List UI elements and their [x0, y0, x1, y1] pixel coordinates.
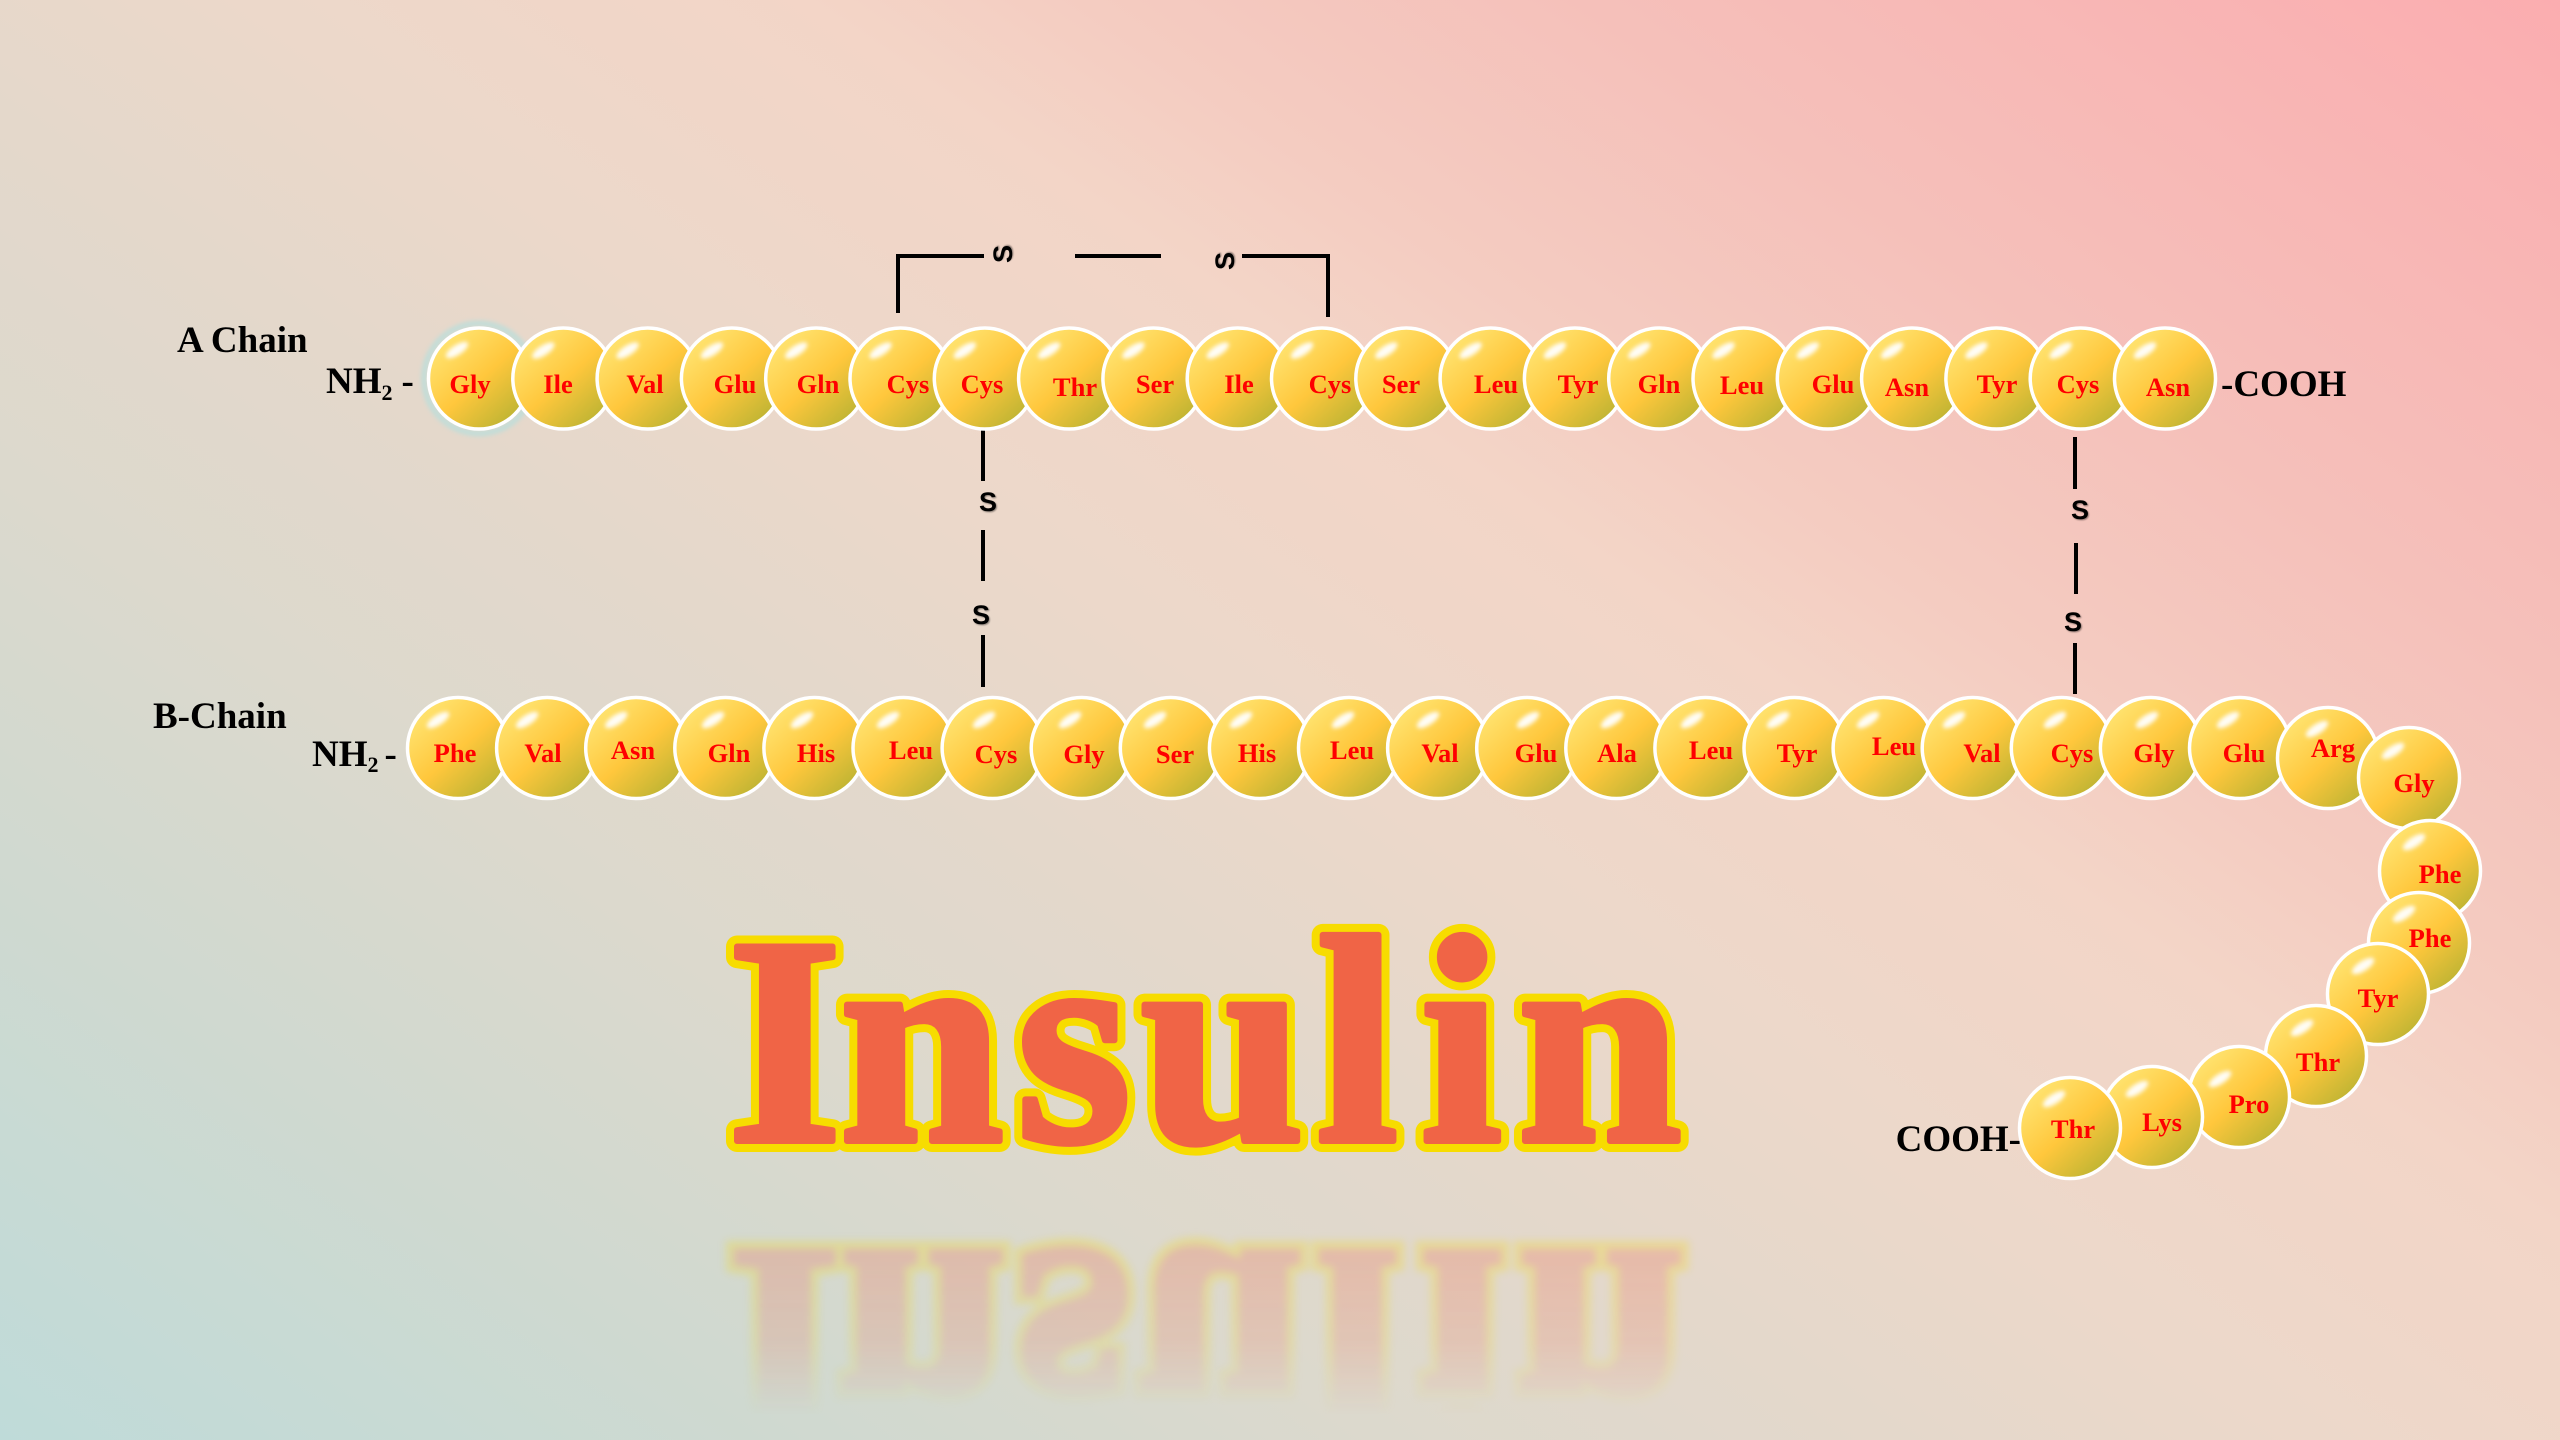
bead: Leu — [1440, 328, 1541, 429]
bead: Ala — [1566, 698, 1667, 798]
bead: Cys: Cys — [2057, 369, 2099, 399]
bead: Gly: Gly — [2133, 738, 2175, 768]
label: B-Chain: B-Chain — [153, 696, 287, 737]
bead: Cys — [942, 698, 1043, 798]
bead: Thr — [2020, 1078, 2120, 1178]
bead: Cys — [2011, 698, 2112, 798]
bead: Cys: Cys — [975, 739, 1017, 769]
bead: Phe — [2368, 892, 2470, 994]
bead: Leu: Leu — [1872, 731, 1916, 761]
bead: Cys: Cys — [961, 369, 1003, 399]
bead: Thr: Thr — [1053, 372, 1097, 402]
bead: Ala: Ala — [1597, 738, 1637, 768]
bead: Leu: Leu — [1474, 369, 1518, 399]
disulfide bridge: A Cys to B Cys left — [972, 430, 997, 687]
bead: Ser — [1120, 698, 1221, 798]
disulfide bridge: A Cys to B Cys right: S — [2071, 495, 2089, 525]
bead: Gln: Gln — [797, 369, 840, 399]
bead: Ser: Ser — [1382, 369, 1420, 399]
bead: Ser — [1356, 328, 1457, 429]
disulfide bridge: A Cys to B Cys right — [2064, 437, 2089, 694]
bead: Arg — [2278, 708, 2378, 808]
bead: Asn: Asn — [2146, 372, 2190, 402]
bead: Phe: Phe — [2419, 859, 2462, 889]
bead: Glu — [1477, 698, 1578, 798]
bead: Gln: Gln — [708, 738, 751, 768]
bead: Ser: Ser — [1156, 739, 1194, 769]
bead: Gly: Gly — [1063, 739, 1105, 769]
bead: Tyr — [1524, 328, 1625, 429]
bead: Lys — [2102, 1066, 2202, 1168]
bead: Ser — [1103, 328, 1204, 429]
bead: Phe: Phe — [2409, 923, 2452, 953]
disulfide bridge: A Cys to B Cys left: S — [979, 487, 997, 517]
bead: Gly — [2358, 728, 2460, 828]
bead: Tyr: Tyr — [1777, 738, 1818, 768]
bead: Cys: Cys — [1309, 369, 1351, 399]
bead: Gln: Gln — [1638, 369, 1681, 399]
bead: Leu: Leu — [1720, 370, 1764, 400]
bead: Thr — [2266, 1006, 2366, 1106]
bead: Tyr: Tyr — [1977, 369, 2018, 399]
bead: Asn — [2114, 328, 2216, 429]
bead: Gln — [766, 328, 867, 429]
disulfide bridge: A Cys to B Cys right: S — [2064, 607, 2082, 637]
bead: Gly — [424, 324, 534, 434]
bead: Ile — [513, 328, 614, 429]
bead: His: His — [797, 738, 835, 768]
bead: Cys: Cys — [887, 369, 929, 399]
bead: Leu — [1693, 328, 1794, 429]
bead: Gly: Gly — [2393, 768, 2435, 798]
bead: Pro: Pro — [2229, 1089, 2269, 1119]
bead: Ile — [1187, 328, 1288, 429]
bead: Asn: Asn — [1885, 372, 1929, 402]
bead: Thr: Thr — [2051, 1114, 2095, 1144]
bead: Glu — [1777, 328, 1878, 429]
label: A chain N-terminus NH2: NH — [326, 361, 382, 402]
bead: Asn — [1862, 328, 1963, 429]
bead: Val — [1388, 698, 1489, 798]
disulfide bridge within A chain — [898, 245, 1328, 317]
bead: Gly — [1031, 698, 1132, 798]
bead: Leu — [853, 698, 954, 798]
bead: Leu — [1833, 698, 1934, 798]
label: A chain N-terminus NH2: 2 — [382, 380, 392, 405]
bead: Tyr: Tyr — [2358, 983, 2399, 1013]
bead: Glu: Glu — [2223, 738, 2266, 768]
bead: Gln — [1609, 328, 1710, 429]
bead: Cys: Cys — [2051, 738, 2093, 768]
bead: Val — [497, 698, 598, 798]
bead: Glu — [681, 328, 782, 429]
bead: Asn — [586, 698, 687, 798]
bead: Phe — [408, 698, 508, 798]
bead: Val — [597, 328, 698, 429]
bead: Tyr — [2328, 944, 2428, 1044]
bead: Gln — [675, 698, 776, 798]
bead: Val: Val — [524, 738, 562, 768]
bead: Cys — [1272, 328, 1372, 429]
disulfide bridge within A chain: S — [988, 245, 1018, 263]
bead: Val: Val — [1963, 738, 2001, 768]
bead: Glu — [2190, 698, 2290, 798]
bead: Glu: Glu — [714, 369, 757, 399]
label: B chain N-terminus NH2: 2 — [368, 752, 378, 777]
bead: Cys — [934, 328, 1035, 429]
bead: Val — [1922, 698, 2023, 798]
label: B chain N-terminus NH2: - — [384, 734, 397, 775]
bead: Leu: Leu — [1689, 735, 1733, 765]
bead: Ile: Ile — [1224, 369, 1254, 399]
bead: Pro — [2188, 1046, 2290, 1148]
title: Insulin: Insulin — [727, 877, 1682, 1206]
bead: Ile: Ile — [543, 369, 573, 399]
bead: Val: Val — [1421, 738, 1459, 768]
bead: Val: Val — [626, 369, 664, 399]
bead: Gly — [2100, 698, 2201, 798]
title: Insulin: Insulin — [727, 877, 1682, 1206]
bead: Cys — [2030, 328, 2131, 429]
bead: Thr: Thr — [2296, 1047, 2340, 1077]
bead: Thr — [1019, 328, 1120, 429]
label: B chain N-terminus NH2: NH — [312, 734, 368, 775]
label: A chain N-terminus NH2: - — [402, 361, 414, 402]
bead: Asn: Asn — [611, 735, 655, 765]
title reflection — [722, 1234, 1692, 1396]
bead: His — [764, 698, 865, 798]
bead: Glu: Glu — [1515, 738, 1558, 768]
bead: Leu — [1298, 698, 1400, 798]
bead: Gly: Gly — [449, 369, 491, 399]
bead: Phe — [2380, 820, 2480, 922]
bead: Leu — [1655, 698, 1756, 798]
bead: His: His — [1238, 738, 1276, 768]
bead: Cys — [850, 328, 951, 429]
label: B chain C-terminus COOH: COOH- — [1896, 1119, 2021, 1160]
bead: Leu: Leu — [889, 735, 933, 765]
disulfide bridge within A chain: S — [1210, 252, 1240, 270]
disulfide bridge: A Cys to B Cys left: S — [972, 600, 990, 630]
bead: Tyr — [1946, 328, 2047, 429]
bead: Ser: Ser — [1136, 369, 1174, 399]
bead: Phe: Phe — [434, 738, 477, 768]
bead: Leu: Leu — [1330, 735, 1374, 765]
bead: Arg: Arg — [2311, 733, 2355, 763]
label: A chain C-terminus COOH: -COOH — [2221, 364, 2347, 405]
bead: Lys: Lys — [2142, 1107, 2182, 1137]
bead: His — [1209, 698, 1310, 798]
B chain beads — [408, 698, 2480, 1178]
label: A Chain: A Chain — [177, 320, 308, 361]
A chain beads — [424, 324, 2216, 434]
bead: Glu: Glu — [1812, 369, 1855, 399]
bead: Tyr — [1744, 698, 1845, 798]
bead: Tyr: Tyr — [1558, 369, 1599, 399]
